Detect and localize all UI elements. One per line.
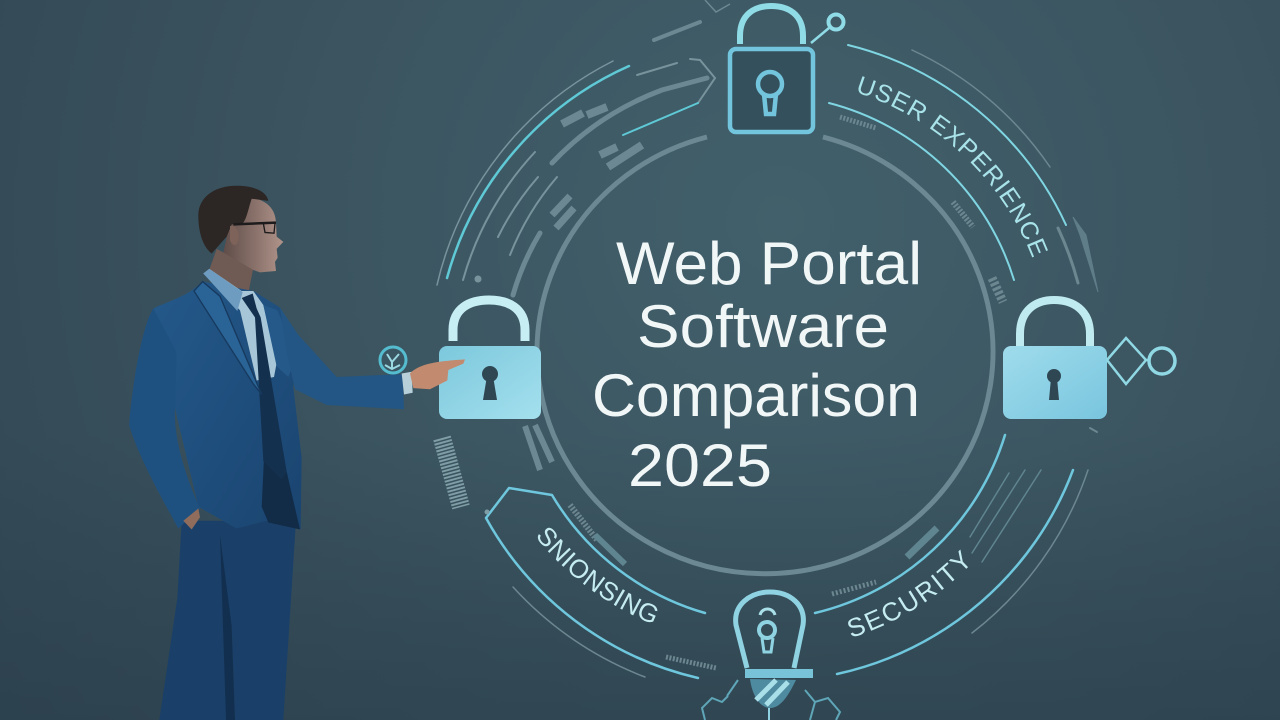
- cuff: [402, 372, 413, 394]
- sleeve: hanging arm: [129, 309, 200, 528]
- inner gray ring: [537, 137, 993, 574]
- label: user experience: USER EXPERIENCE: [858, 76, 1048, 258]
- neck: [207, 249, 253, 293]
- icon: bottom bulb-shaped lock: [702, 592, 840, 720]
- hair: [198, 186, 268, 253]
- title: 2025: [628, 432, 772, 499]
- icon: small badge beside padlock: [380, 347, 406, 373]
- right lapel: [263, 305, 297, 377]
- icon: top outlined padlock: [705, 0, 844, 132]
- glasses: [233, 223, 276, 233]
- icon: right padlock: [1003, 300, 1175, 419]
- panel: upper-left technical arcs: [437, 22, 715, 295]
- trousers: [159, 521, 296, 720]
- hand in pocket: [183, 508, 200, 530]
- pointing hand: [410, 359, 465, 389]
- jacket: [153, 282, 302, 530]
- label: lower-left arc: SNIONSING: [538, 528, 658, 622]
- tie: [242, 293, 287, 479]
- title: Web Portal: [616, 230, 922, 297]
- head: [223, 197, 283, 272]
- lapel: [194, 282, 262, 394]
- trouser shadow: [220, 535, 235, 720]
- panel: user experience arc: [828, 44, 1098, 304]
- icon: left padlock: [439, 300, 541, 419]
- man in blue suit pointing at padlock: [129, 186, 465, 720]
- jacket opening: [262, 458, 300, 530]
- title: Comparison: [592, 362, 920, 429]
- panel: security arc: [814, 427, 1098, 676]
- ear: [230, 226, 239, 245]
- panel: lower-left shield arc: [433, 424, 716, 680]
- extended arm: [280, 308, 404, 409]
- shirt and collar: [203, 269, 277, 380]
- title: [592, 230, 922, 499]
- title: Software: [637, 293, 889, 360]
- label: security: SECURITY: [848, 550, 968, 636]
